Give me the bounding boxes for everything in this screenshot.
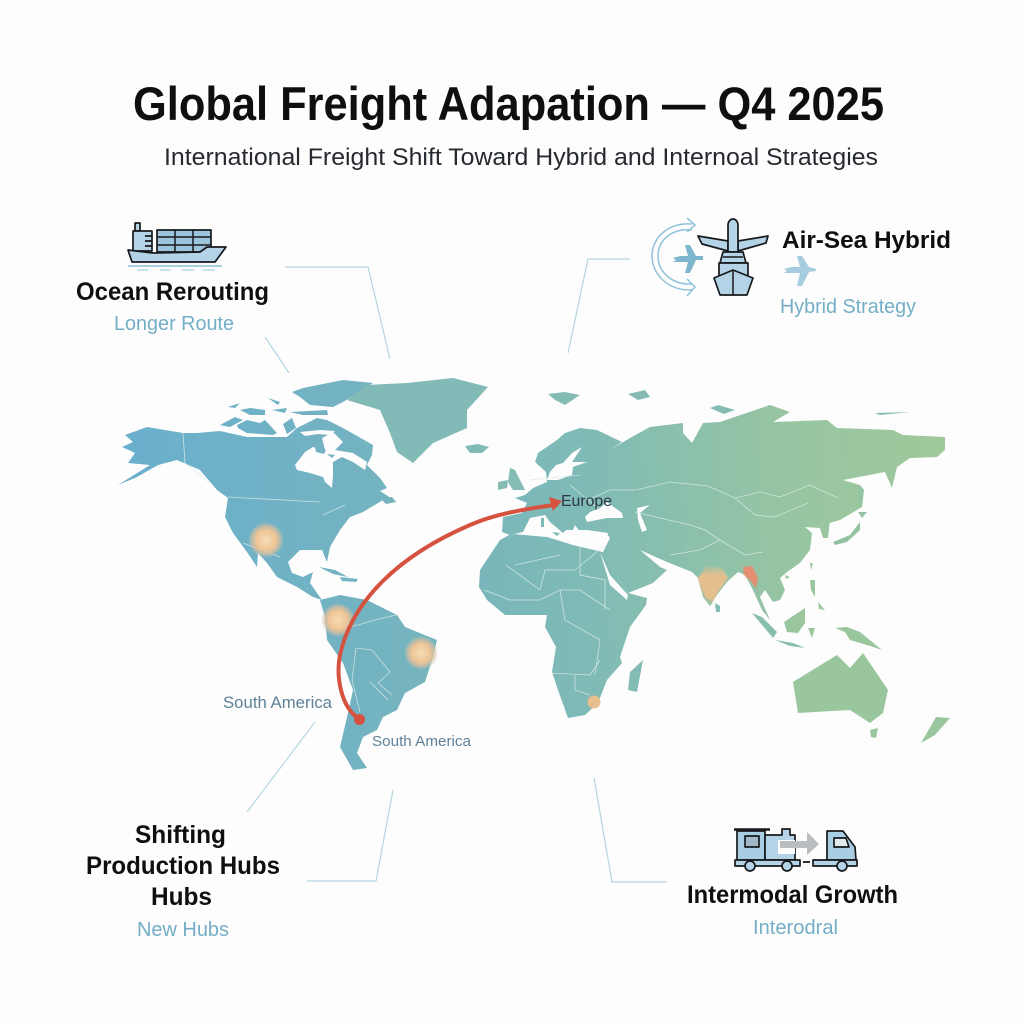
landmass: japan xyxy=(833,485,867,545)
hotspot: colombia peru xyxy=(321,603,355,637)
landmass: sumatra and java xyxy=(752,613,805,648)
landmass: hudson bay islands xyxy=(315,447,335,458)
title: Global Freight Adapation — Q4 2025 xyxy=(133,77,884,130)
hudson bay and arctic channels xyxy=(295,430,367,488)
landmass: iceland xyxy=(465,444,489,453)
icon: train to truck xyxy=(734,829,857,871)
sublabel: new hubs: New Hubs xyxy=(137,919,229,941)
sublabel: interodral: Interodral xyxy=(753,917,838,939)
panel: ocean rerouting xyxy=(76,223,269,335)
hotspot: north america xyxy=(248,522,284,558)
sublabel: hybrid strategy: Hybrid Strategy xyxy=(780,296,916,318)
map label: south america left: South America xyxy=(223,694,333,712)
heading: shifting production hubs: Shifting xyxy=(135,821,226,849)
landmass: italy and mediterranean islands xyxy=(541,510,566,536)
hotspot: south africa xyxy=(588,696,600,708)
landmass: eurasia xyxy=(502,405,945,620)
icon: container ship xyxy=(128,223,226,270)
landmass: caribbean xyxy=(319,497,396,582)
subtitle: International Freight Shift Toward Hybrid and Internoal Strategies xyxy=(164,144,878,171)
icon: plane over ship xyxy=(698,219,768,295)
landmass: arctic islands xyxy=(220,380,373,435)
hotspot: brazil xyxy=(404,636,438,670)
map label: south america right: South America xyxy=(372,733,472,750)
landmass: south america xyxy=(320,595,437,770)
hotspot: india xyxy=(698,566,728,605)
heading: intermodal growth: Intermodal Growth xyxy=(687,881,898,909)
heading: ocean rerouting: Ocean Rerouting xyxy=(76,278,269,306)
country borders xyxy=(183,433,838,712)
seas xyxy=(510,447,650,600)
heading: shifting production hubs: Production Hubs xyxy=(86,852,280,880)
route arrow: south america to europe xyxy=(339,497,562,725)
hotspot: myanmar xyxy=(743,566,758,588)
landmass: northern and atlantic islands xyxy=(498,390,910,692)
landmass: asia pacific and islands xyxy=(784,563,950,743)
heading: shifting production hubs: Hubs xyxy=(151,883,212,911)
leader lines: ocean rerouting xyxy=(265,267,390,373)
world map xyxy=(118,378,950,770)
leader line: intermodal growth xyxy=(594,778,667,882)
icon: circular arrows xyxy=(652,218,695,296)
sublabel: longer route: Longer Route xyxy=(114,313,234,335)
map label: europe: Europe xyxy=(561,493,612,510)
landmass: africa xyxy=(479,533,647,718)
heading: air-sea hybrid: Air-Sea Hybrid xyxy=(782,227,951,254)
panel: intermodal growth xyxy=(687,829,898,939)
leader line: air-sea hybrid xyxy=(568,259,630,353)
landmass: north america xyxy=(118,418,397,600)
panel: shifting production hubs xyxy=(86,821,287,941)
landmass: greenland xyxy=(347,378,488,463)
panel: air-sea hybrid xyxy=(652,218,951,318)
icon: plane in arrows xyxy=(673,245,703,273)
icon: small plane xyxy=(784,256,816,286)
leader lines: shifting production hubs xyxy=(247,722,393,881)
